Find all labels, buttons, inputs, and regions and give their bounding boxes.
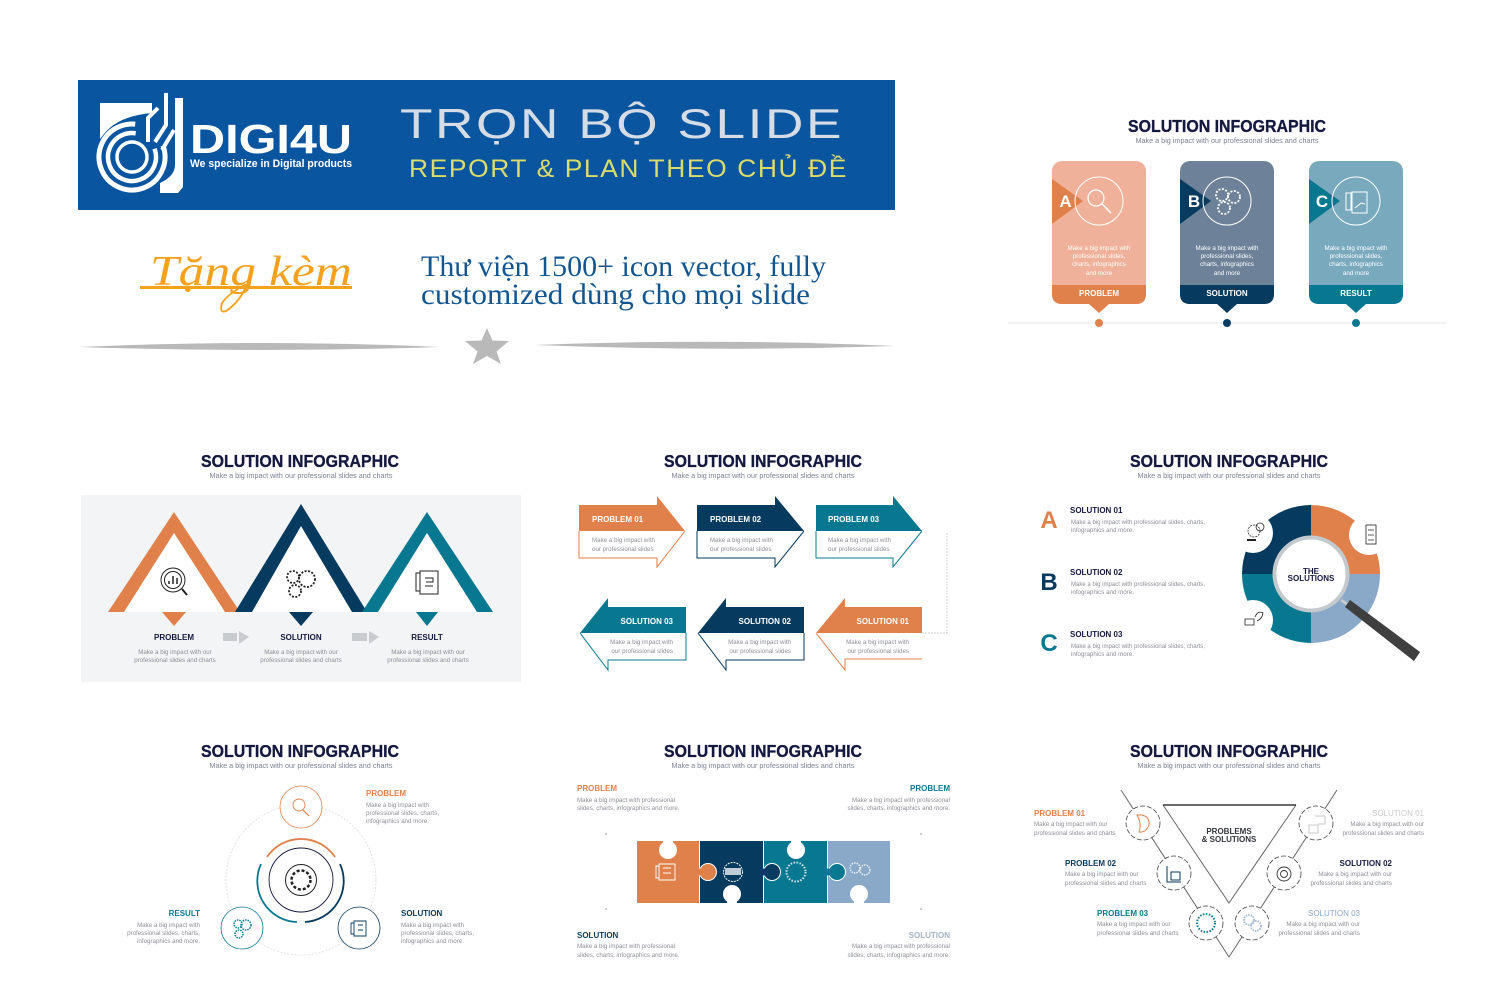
card B: charts, infographics xyxy=(1200,261,1254,268)
title: SOLUTION INFOGRAPHIC xyxy=(1130,451,1328,471)
panel: triangles xyxy=(81,451,521,682)
triangle: result xyxy=(362,512,493,664)
text: problem: Make a big impact with xyxy=(366,802,429,809)
logo tagline: We specialize in Digital products xyxy=(190,158,352,170)
text: solution: SOLUTION xyxy=(401,909,443,918)
text: problem 01: Make a big impact with our xyxy=(1034,821,1108,828)
card C: C xyxy=(1316,192,1328,211)
triangle: problem: PROBLEM xyxy=(154,633,194,642)
solution list: Make a big impact with professional slides, charts, xyxy=(1071,581,1205,588)
card C: professional slides, xyxy=(1330,253,1383,260)
center gear xyxy=(269,848,333,912)
node: result xyxy=(221,907,263,949)
timeline xyxy=(1008,319,1447,327)
solution list: SOLUTION 03 xyxy=(1070,630,1123,639)
bonus description: customized dùng cho mọi slide xyxy=(421,278,810,311)
text: bottom right: slides, charts, infographics and more. xyxy=(848,952,950,959)
solution list: B xyxy=(1040,569,1058,596)
arrow: solution 02: our professional slides xyxy=(729,648,791,655)
triangle: problem: Make a big impact with our xyxy=(138,649,212,656)
node: solution 03 xyxy=(1235,906,1269,940)
card C xyxy=(1309,161,1403,313)
text: problem 02: PROBLEM 02 xyxy=(1065,859,1117,868)
arc: result xyxy=(257,864,297,922)
arrow: solution 01: Make a big impact with xyxy=(846,639,910,646)
card B: Make a big impact with xyxy=(1196,245,1259,252)
card B: professional slides, xyxy=(1201,253,1254,260)
text: top right: PROBLEM xyxy=(910,784,950,793)
subtitle: Make a big impact with our professional slides and charts xyxy=(210,471,393,480)
subtitle: Make a big impact with our professional slides and charts xyxy=(210,761,393,770)
logo icon xyxy=(90,93,183,199)
text: result: professional slides, charts, xyxy=(127,930,200,937)
node: solution xyxy=(338,907,380,949)
bonus description xyxy=(421,250,826,311)
solution list: SOLUTION 02 xyxy=(1070,568,1123,577)
arrow: problem 02: Make a big impact with xyxy=(710,537,773,544)
arrow: solution 03: Make a big impact with xyxy=(610,639,674,646)
text: problem: professional slides, charts, xyxy=(366,810,439,817)
arrow: solution 02 xyxy=(698,598,804,670)
arrow: solution 03: our professional slides xyxy=(611,648,673,655)
panel: inverted triangle xyxy=(1034,741,1425,957)
title: SOLUTION INFOGRAPHIC xyxy=(1128,116,1326,136)
title: SOLUTION INFOGRAPHIC xyxy=(201,741,399,761)
text: top right xyxy=(848,784,950,812)
text: solution 02: Make a big impact with our xyxy=(1318,871,1392,878)
text: solution 03 xyxy=(1278,909,1361,937)
card A: charts, infographics xyxy=(1072,261,1126,268)
text: bottom right: SOLUTION xyxy=(909,931,950,940)
triangle: solution xyxy=(235,504,367,664)
inner triangle: PROBLEMS xyxy=(1206,827,1252,836)
node: solution 01 xyxy=(1299,806,1333,840)
card A: A xyxy=(1059,192,1072,211)
triangle: solution: Make a big impact with our xyxy=(264,649,338,656)
triangle: result: Make a big impact with our xyxy=(391,649,465,656)
solution list: infographics and more. xyxy=(1071,589,1134,596)
panel: puzzle xyxy=(577,741,950,959)
text: solution xyxy=(401,909,474,945)
card C: Make a big impact with xyxy=(1325,245,1388,252)
arrow: problem 03: our professional slides xyxy=(828,546,890,553)
text: top left: slides, charts, infographics and more. xyxy=(577,805,680,812)
triangle: solution: professional slides and charts xyxy=(260,657,342,664)
arrow: solution 02: Make a big impact with xyxy=(728,639,792,646)
text: problem 01: professional slides and charts xyxy=(1034,830,1116,837)
connector xyxy=(922,533,947,633)
text: problem 03: professional slides and charts xyxy=(1097,930,1179,937)
donut chart: SOLUTIONS xyxy=(1288,574,1335,583)
banner subheadline: REPORT & PLAN THEO CHỦ ĐỀ xyxy=(409,153,848,183)
card A: Make a big impact with xyxy=(1068,245,1131,252)
text: top right: slides, charts, infographics and more. xyxy=(848,805,950,812)
text: problem 03: PROBLEM 03 xyxy=(1097,909,1149,918)
arrow: problem 02 xyxy=(697,496,804,567)
text: top left xyxy=(577,784,680,812)
text: problem: PROBLEM xyxy=(366,789,406,798)
solution list: A xyxy=(1040,507,1058,534)
arrow: problem 03: PROBLEM 03 xyxy=(828,515,880,524)
solution list: infographics and more. xyxy=(1071,527,1134,534)
arrow: problem 01: our professional slides xyxy=(592,546,654,553)
arrow: solution 03: SOLUTION 03 xyxy=(621,617,674,626)
text: solution 03: Make a big impact with our xyxy=(1286,921,1360,928)
star divider xyxy=(79,328,895,364)
card C: RESULT xyxy=(1340,289,1372,298)
node: problem 03 xyxy=(1189,906,1223,940)
text: result: RESULT xyxy=(169,909,200,918)
text: solution: professional slides, charts, xyxy=(401,930,474,937)
text: solution: Make a big impact with xyxy=(401,922,464,929)
puzzle pieces xyxy=(637,841,890,903)
text: top left: Make a big impact with professional xyxy=(577,797,675,804)
card A: professional slides, xyxy=(1073,253,1126,260)
card A: and more xyxy=(1086,270,1113,277)
node: problem xyxy=(280,786,322,828)
text: solution: infographics and more. xyxy=(401,938,464,945)
icon: badge xyxy=(724,862,742,882)
panel: circular cycle xyxy=(127,741,474,955)
text: bottom right xyxy=(848,931,950,959)
text: solution 01: Make a big impact with our xyxy=(1350,821,1424,828)
arrow: solution 01: our professional slides xyxy=(847,648,909,655)
text: solution 01: SOLUTION 01 xyxy=(1372,809,1425,818)
bonus description: Thư viện 1500+ icon vector, fully xyxy=(421,250,826,283)
subtitle: Make a big impact with our professional slides and charts xyxy=(1138,471,1321,480)
text: problem 02 xyxy=(1065,859,1147,887)
panel: three cards xyxy=(1008,116,1447,327)
text: problem 02: professional slides and charts xyxy=(1065,880,1147,887)
subtitle: Make a big impact with our professional slides and charts xyxy=(1138,761,1321,770)
solution list xyxy=(1040,506,1205,658)
text: top left: PROBLEM xyxy=(577,784,617,793)
arrow: problem 01: Make a big impact with xyxy=(592,537,655,544)
triangle: solution: SOLUTION xyxy=(280,633,322,642)
node: problem 01 xyxy=(1126,806,1160,840)
card B: SOLUTION xyxy=(1206,289,1248,298)
outer V xyxy=(1121,790,1337,957)
bonus script label xyxy=(140,249,352,312)
title: SOLUTION INFOGRAPHIC xyxy=(201,451,399,471)
arrow: solution 03 xyxy=(580,598,686,670)
arrow: problem 01 xyxy=(579,496,685,567)
icon: document xyxy=(656,864,675,880)
text: solution 02: professional slides and charts xyxy=(1310,880,1392,887)
triangle: result: professional slides and charts xyxy=(387,657,469,664)
text: solution 01 xyxy=(1342,809,1425,837)
text: solution 02: SOLUTION 02 xyxy=(1340,859,1393,868)
solution list: Make a big impact with professional slides, charts, xyxy=(1071,519,1205,526)
arrow: solution 01 xyxy=(816,598,922,670)
arc: problem xyxy=(267,839,335,857)
logo wordmark: DIGI4U xyxy=(190,116,352,162)
panel: arrows xyxy=(579,451,947,670)
text: bottom left: slides, charts, infographics and more. xyxy=(577,952,680,959)
text: problem xyxy=(366,789,439,825)
text: problem 01 xyxy=(1034,809,1116,837)
card B: B xyxy=(1188,192,1200,211)
text: bottom left: SOLUTION xyxy=(577,931,619,940)
magnifier handle xyxy=(1341,600,1420,661)
text: problem 03 xyxy=(1097,909,1179,937)
title: SOLUTION INFOGRAPHIC xyxy=(664,451,862,471)
dashed orbit xyxy=(226,805,376,955)
arrow: solution 02: SOLUTION 02 xyxy=(739,617,792,626)
banner headline: TRỌN BỘ SLIDE xyxy=(400,100,844,147)
text: bottom left: Make a big impact with professional xyxy=(577,943,675,950)
arrow: problem 01: PROBLEM 01 xyxy=(592,515,644,524)
arrow: problem 03: Make a big impact with xyxy=(828,537,891,544)
icon: gears xyxy=(850,863,870,875)
text: problem 03: Make a big impact with our xyxy=(1097,921,1171,928)
text: top right: Make a big impact with professional xyxy=(852,797,950,804)
text: result: infographics and more. xyxy=(137,938,200,945)
subtitle: Make a big impact with our professional slides and charts xyxy=(1136,136,1319,145)
title: SOLUTION INFOGRAPHIC xyxy=(664,741,862,761)
background card xyxy=(81,495,521,682)
card C: and more xyxy=(1343,270,1370,277)
arc: solution xyxy=(305,864,344,922)
text: solution 02 xyxy=(1310,859,1393,887)
card B: and more xyxy=(1214,270,1241,277)
inner triangle xyxy=(1163,805,1296,903)
text: problem 02: Make a big impact with our xyxy=(1065,871,1139,878)
card C: charts, infographics xyxy=(1329,261,1383,268)
node: solution 02 xyxy=(1267,856,1301,890)
icon: donut bottom left xyxy=(1245,612,1263,625)
subtitle: Make a big impact with our professional slides and charts xyxy=(672,761,855,770)
triangle: problem xyxy=(108,512,240,664)
card B xyxy=(1180,161,1274,313)
banner xyxy=(78,80,895,210)
arrow: problem to solution xyxy=(223,631,249,644)
text: result xyxy=(127,909,201,945)
text: result: Make a big impact with xyxy=(137,922,201,929)
card A xyxy=(1052,161,1146,313)
donut chart: THE xyxy=(1303,567,1320,576)
text: bottom left xyxy=(577,931,680,959)
text: problem: infographics and more. xyxy=(366,818,429,825)
solution list: C xyxy=(1040,630,1058,657)
panel: magnifier donut xyxy=(1040,451,1420,661)
arrow: solution 01: SOLUTION 01 xyxy=(857,617,910,626)
triangle: result: RESULT xyxy=(411,633,443,642)
bonus script label: Tặng kèm xyxy=(150,249,352,295)
card A: PROBLEM xyxy=(1079,289,1119,298)
icon: network xyxy=(786,862,806,882)
text: solution 03: SOLUTION 03 xyxy=(1308,909,1361,918)
icon: donut top left xyxy=(1247,523,1264,540)
text: problem 01: PROBLEM 01 xyxy=(1034,809,1086,818)
triangle: problem: professional slides and charts xyxy=(134,657,216,664)
solution list: SOLUTION 01 xyxy=(1070,506,1123,515)
arrow: solution to result xyxy=(352,631,379,644)
arrow: problem 02: PROBLEM 02 xyxy=(710,515,762,524)
icon: donut top right xyxy=(1366,525,1376,544)
inner triangle: & SOLUTIONS xyxy=(1202,835,1257,844)
text: solution 03: professional slides and charts xyxy=(1278,930,1360,937)
node: problem 02 xyxy=(1157,856,1191,890)
subtitle: Make a big impact with our professional slides and charts xyxy=(672,471,855,480)
donut chart xyxy=(1233,505,1389,643)
text: solution 01: professional slides and charts xyxy=(1342,830,1424,837)
arrow: problem 03 xyxy=(816,496,922,567)
solution list: Make a big impact with professional slides, charts, xyxy=(1071,643,1205,650)
arrow: problem 02: our professional slides xyxy=(710,546,772,553)
solution list: infographics and more. xyxy=(1071,651,1134,658)
text: bottom right: Make a big impact with professional xyxy=(852,943,950,950)
title: SOLUTION INFOGRAPHIC xyxy=(1130,741,1328,761)
corner ticks xyxy=(605,833,922,910)
